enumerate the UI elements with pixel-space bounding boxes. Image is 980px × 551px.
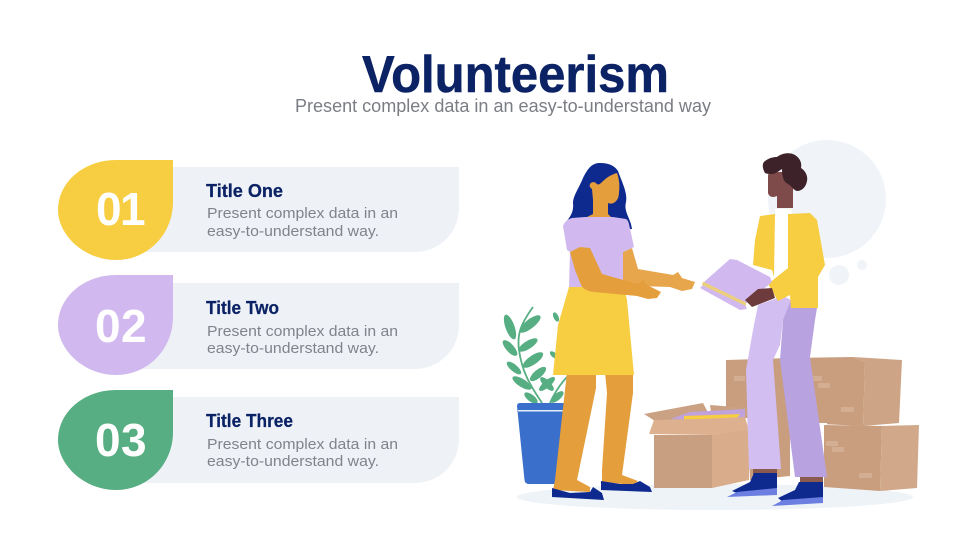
woman figure — [552, 163, 695, 500]
description two: easy-to-understand way. — [207, 340, 379, 357]
description one: Present complex data in an — [207, 205, 398, 222]
heading three: Title Three — [206, 410, 293, 431]
ground shadow — [517, 484, 913, 510]
white shirt — [774, 209, 792, 282]
title: Volunteerism — [362, 46, 669, 104]
subtitle: Present complex data in an easy-to-understand way — [295, 96, 711, 116]
hand — [745, 288, 775, 307]
trousers front leg — [746, 296, 791, 469]
near arm — [570, 247, 661, 299]
panel: item three — [58, 390, 459, 490]
number drop three — [58, 390, 173, 490]
plant in blue pot — [500, 307, 568, 484]
head and neck — [585, 173, 619, 218]
heading one: Title One — [206, 180, 283, 201]
face and neck — [768, 172, 793, 208]
sneakers — [727, 473, 823, 506]
legs — [553, 372, 638, 492]
card background three — [140, 397, 459, 483]
card background one — [140, 167, 459, 252]
heading two: Title Two — [206, 297, 279, 318]
number one: 01 — [96, 183, 146, 235]
yellow jacket — [753, 213, 825, 308]
description three: Present complex data in an — [207, 436, 398, 453]
ankles — [753, 469, 823, 483]
skirt — [553, 287, 634, 375]
panel: item one — [58, 160, 459, 260]
blouse — [563, 217, 634, 290]
open cardboard box — [644, 403, 749, 488]
far arm — [623, 248, 695, 291]
panel: item two — [58, 275, 459, 375]
hair — [564, 163, 632, 229]
illustration: volunteers with boxes — [500, 140, 919, 510]
description two: Present complex data in an — [207, 323, 398, 340]
stacked cardboard boxes — [726, 357, 919, 491]
thought bubble — [768, 140, 886, 285]
shoes — [552, 481, 652, 500]
number drop two — [58, 275, 173, 375]
man figure — [700, 153, 827, 506]
description one: easy-to-understand way. — [207, 223, 379, 240]
card background two — [140, 283, 459, 369]
description three: easy-to-understand way. — [207, 453, 379, 470]
number two: 02 — [95, 300, 147, 352]
book — [700, 259, 772, 310]
trousers back leg — [780, 300, 827, 477]
number drop one — [58, 160, 173, 260]
hair — [763, 153, 807, 191]
number three: 03 — [95, 414, 147, 466]
